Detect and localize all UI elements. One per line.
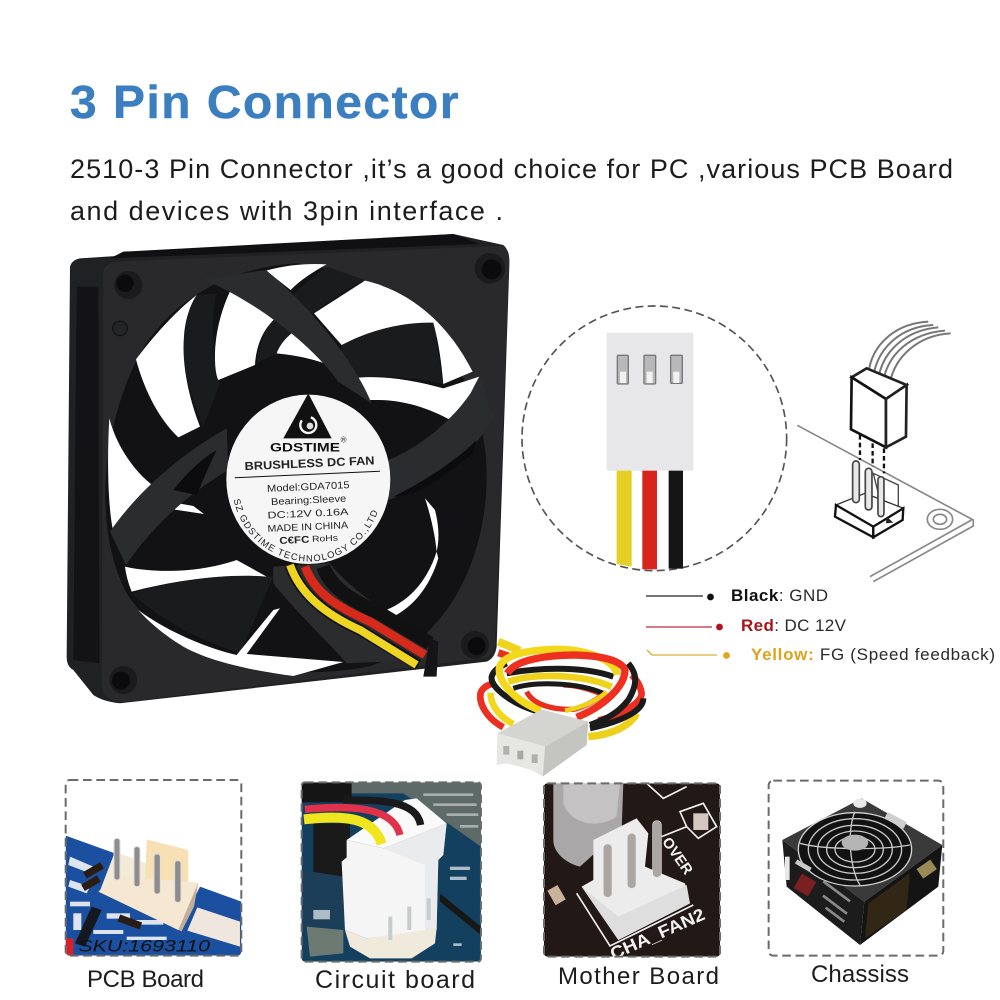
description text: and devices with 3pin interface . (70, 196, 503, 226)
application: motherboard (544, 783, 720, 964)
legend black: Black: GND (731, 586, 828, 605)
fan (66, 234, 510, 704)
fan hub label: ® (341, 436, 347, 445)
application: motherboard: OVER (658, 835, 696, 878)
fan hub label: RoHs (312, 533, 339, 544)
plug body (851, 368, 907, 447)
fan hub label: Model:GDA7015 (267, 480, 350, 495)
fan hub label: Bearing:Sleeve (271, 494, 346, 508)
wires to plug (868, 322, 951, 383)
legend red: Red: DC 12V (741, 616, 847, 635)
connector wire loop (480, 642, 643, 777)
three wires (617, 471, 683, 569)
fan hub label: BRUSHLESS DC FAN (244, 454, 375, 473)
fan hub label: DC:12V 0.16A (267, 507, 349, 522)
application: chassis power supply (769, 781, 943, 956)
wire colour legend (646, 586, 995, 664)
application: PCB board: SKU:1693110 (78, 937, 211, 956)
white header (582, 818, 690, 940)
blade highlights (132, 267, 443, 653)
board outline (797, 425, 973, 582)
legend red (646, 616, 847, 635)
fan corner screw holes (109, 253, 505, 694)
label: Circuit board: Circuit board (315, 966, 475, 994)
PCB blue board (66, 836, 241, 956)
fan hub label: GDSTIME (270, 440, 340, 454)
fan aperture and blades (105, 263, 487, 672)
fan hub label (226, 394, 390, 564)
description text (70, 154, 953, 226)
application: PCB board (66, 780, 241, 956)
power supply unit (782, 798, 942, 945)
description text: 2510-3 Pin Connector ,it’s a good choice for PC ,various PCB Board (70, 154, 953, 184)
legend yellow: Yellow: FG (Speed feedback) (751, 645, 995, 664)
label: Chassiss: Chassiss (811, 961, 909, 988)
white plug top opening (347, 798, 447, 848)
wires (304, 800, 421, 844)
fan hub label: C€FC (279, 535, 310, 547)
air gaps (108, 264, 479, 676)
motherboard header diagram (797, 322, 973, 582)
connector plug (497, 709, 588, 777)
frame struts (110, 270, 493, 663)
white plug body (342, 823, 447, 938)
plug housing (607, 333, 693, 471)
connector close-up circle (522, 306, 787, 571)
header base and pins (835, 461, 903, 537)
label: Mother Board: Mother Board (558, 963, 719, 990)
label: PCB Board: PCB Board (87, 966, 204, 993)
fan hub label: SZ GDSTIME TECHNOLOGY CO.,LTD (234, 499, 377, 562)
application: motherboard: CHA_FAN2 (607, 904, 708, 964)
header connector (98, 838, 198, 931)
fan body (67, 234, 509, 703)
fan wires (290, 565, 430, 665)
fan hub label: MADE IN CHINA (267, 520, 349, 535)
dashed pin guides (860, 435, 884, 473)
application: circuit board (302, 782, 481, 962)
legend black (646, 586, 828, 605)
title: 3 Pin Connector (70, 76, 460, 128)
